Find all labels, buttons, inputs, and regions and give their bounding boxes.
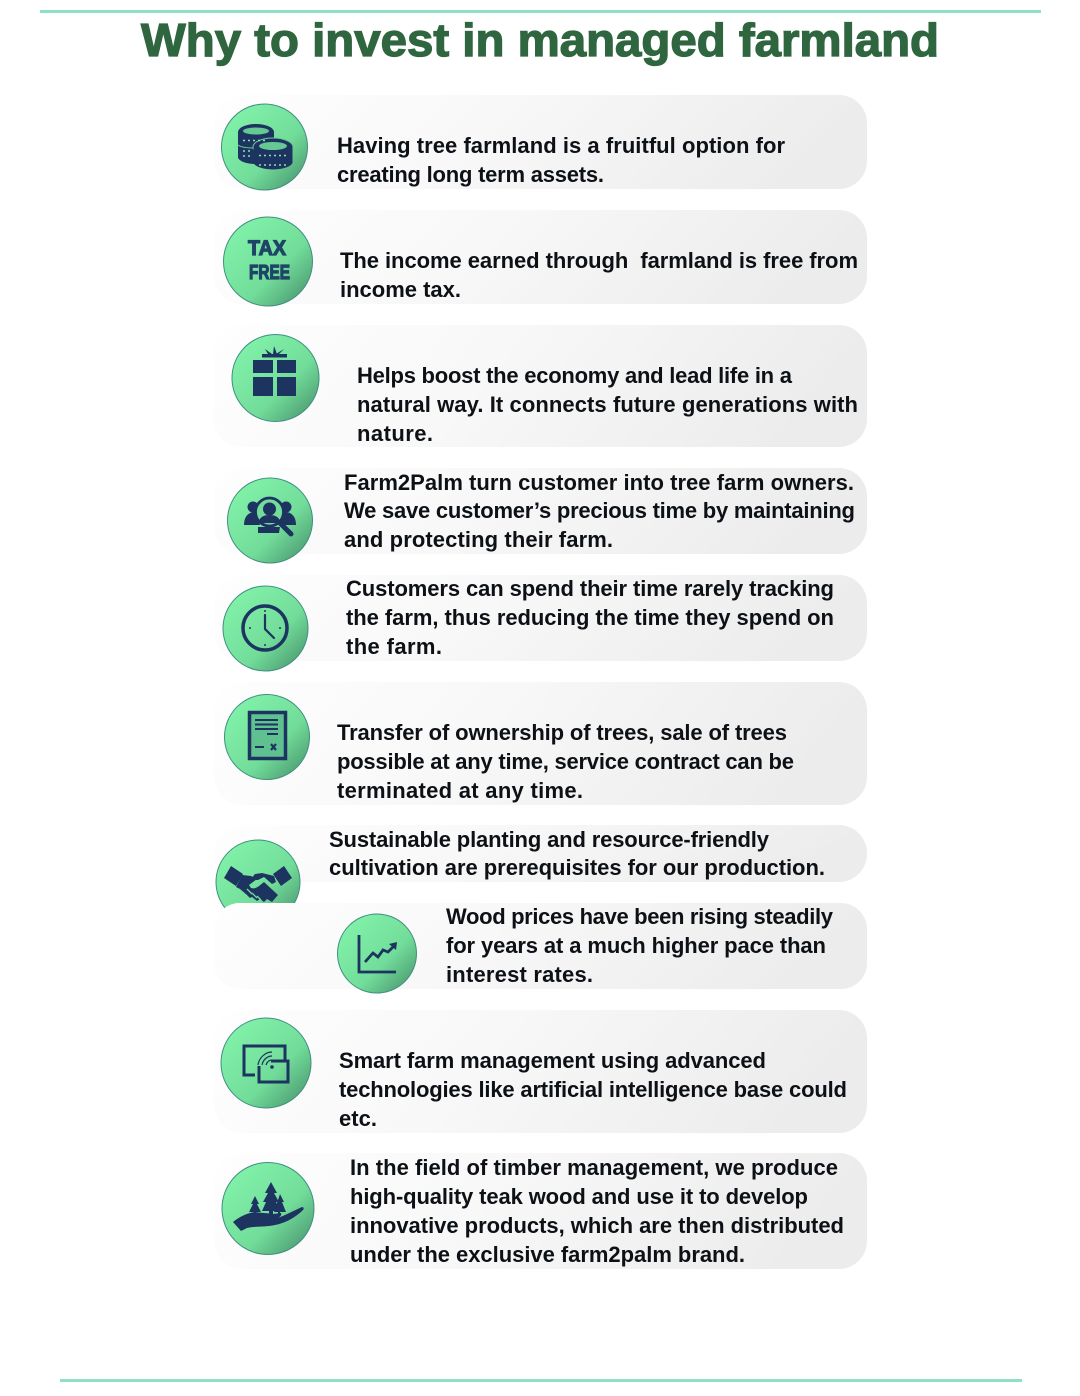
panel 9: smart farm management xyxy=(214,1010,867,1133)
icon: tax free: FREE xyxy=(249,262,290,284)
text: innovative products, which are then distributed xyxy=(350,1213,844,1238)
text: Farm2Palm turn customer into tree farm owners. xyxy=(344,470,854,495)
panel 8: wood prices xyxy=(214,903,867,993)
panel 6: transfer of ownership xyxy=(214,682,867,805)
text: possible at any time, service contract can be xyxy=(337,749,794,774)
text: interest rates. xyxy=(446,962,593,987)
text xyxy=(350,1155,844,1267)
text: income tax. xyxy=(340,277,461,302)
icon: smart devices xyxy=(221,1018,311,1108)
text: cultivation are prerequisites for our production. xyxy=(329,855,825,880)
icon: people search xyxy=(228,478,312,563)
top rule xyxy=(40,10,1041,13)
text: creating long term assets. xyxy=(337,162,604,187)
panel 2: tax free xyxy=(214,210,867,306)
text: Helps boost the economy and lead life in a xyxy=(357,363,793,388)
panel 4: farm owners xyxy=(214,468,867,563)
text xyxy=(337,720,794,803)
text: In the field of timber management, we produce xyxy=(350,1155,838,1180)
text: etc. xyxy=(339,1106,377,1131)
icon: rising chart xyxy=(338,914,416,993)
text: technologies like artificial intelligence base could xyxy=(339,1077,847,1102)
panel 1: long term assets xyxy=(214,95,867,190)
text: Wood prices have been rising steadily xyxy=(446,904,834,929)
text: Having tree farmland is a fruitful option for xyxy=(337,133,785,158)
title: Why to invest in managed farmland xyxy=(141,14,939,66)
text: the farm. xyxy=(346,634,442,659)
icon: handshake xyxy=(216,840,300,924)
text: Sustainable planting and resource-friendly xyxy=(329,827,770,852)
bottom rule xyxy=(60,1379,1022,1382)
text: The income earned through farmland is free from xyxy=(340,248,858,273)
text xyxy=(346,576,834,659)
icon: contract xyxy=(224,694,310,780)
icon: gift xyxy=(232,334,319,422)
text: Customers can spend their time rarely tracking xyxy=(346,576,834,601)
text: natural way. It connects future generations with xyxy=(357,392,858,417)
text: the farm, thus reducing the time they spend on xyxy=(346,605,834,630)
text: We save customer’s precious time by maintaining xyxy=(344,498,855,523)
text xyxy=(344,470,855,552)
text: and protecting their farm. xyxy=(344,527,613,552)
text xyxy=(357,363,858,446)
panel 7: sustainable planting xyxy=(214,825,867,924)
icon: tax free xyxy=(224,217,312,306)
text: nature. xyxy=(357,421,433,446)
icon: clock xyxy=(223,586,308,671)
text xyxy=(337,133,785,187)
text: Smart farm management using advanced xyxy=(339,1048,766,1073)
icon: coins xyxy=(222,104,308,190)
icon: tax free: TAX xyxy=(248,237,286,260)
panel 10: timber management xyxy=(214,1153,867,1269)
text xyxy=(329,827,825,880)
text: high-quality teak wood and use it to develop xyxy=(350,1184,808,1209)
text: Transfer of ownership of trees, sale of trees xyxy=(337,720,787,745)
panel 3: economy xyxy=(214,325,867,447)
text xyxy=(446,904,834,987)
text: for years at a much higher pace than xyxy=(446,933,826,958)
text xyxy=(340,248,858,302)
text xyxy=(339,1048,847,1131)
text: terminated at any time. xyxy=(337,778,583,803)
panel 5: tracking time xyxy=(214,575,867,671)
text: under the exclusive farm2palm brand. xyxy=(350,1242,745,1267)
icon: hand with trees xyxy=(222,1162,314,1254)
